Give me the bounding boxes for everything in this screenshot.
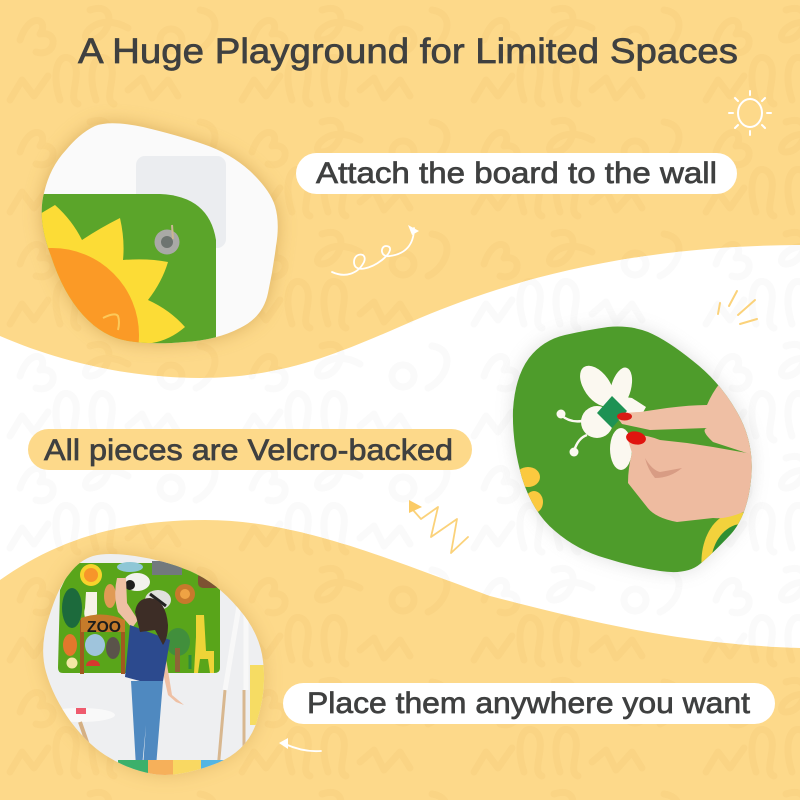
side table: [62, 708, 115, 742]
yellow felt flower: [520, 467, 543, 512]
zoo felt board: [58, 561, 220, 674]
animals top row: [117, 562, 143, 572]
photo blob: girl at the zoo board: [38, 550, 269, 780]
lower fingers and palm: [627, 435, 758, 522]
photo blob: velcro-backed pieces: [508, 322, 757, 577]
label pill: place anywhere: [283, 683, 775, 724]
green felt board: [42, 194, 216, 344]
icon: sun: [729, 91, 771, 135]
metal eyelet: [154, 225, 180, 254]
play mat: [118, 760, 224, 775]
label pill: velcro: [28, 429, 472, 470]
arrow: yellow zigzag: [409, 500, 468, 553]
hand with red nails: [617, 383, 762, 522]
giraffe: [194, 615, 214, 673]
green frog piece: [701, 512, 744, 563]
girl: [115, 578, 184, 773]
white wave band: [0, 245, 800, 648]
label pill: attach: [296, 153, 737, 194]
zoo felt board: ZOO: [87, 619, 121, 636]
felt sunflower: [42, 205, 185, 343]
photo blob: attach the board to the wall: [34, 116, 285, 351]
red fingernails: [617, 412, 632, 420]
tree and snake: [166, 628, 190, 656]
label pill: attach: Attach the board to the wall: [316, 157, 717, 190]
green velcro square: [597, 396, 627, 428]
arrow: small white: [279, 738, 321, 751]
adhesive hook: [136, 156, 226, 248]
upper finger: [617, 385, 751, 454]
title: A Huge Playground for Limited Spaces: [78, 32, 738, 71]
label pill: place anywhere: Place them anywhere you want: [307, 687, 751, 720]
white felt butterfly: [556, 360, 646, 470]
easel and cushion: [217, 606, 264, 763]
sparkle lines: [718, 291, 757, 324]
arrow: curly white: [332, 225, 419, 275]
label pill: velcro: All pieces are Velcro-backed: [44, 434, 453, 467]
